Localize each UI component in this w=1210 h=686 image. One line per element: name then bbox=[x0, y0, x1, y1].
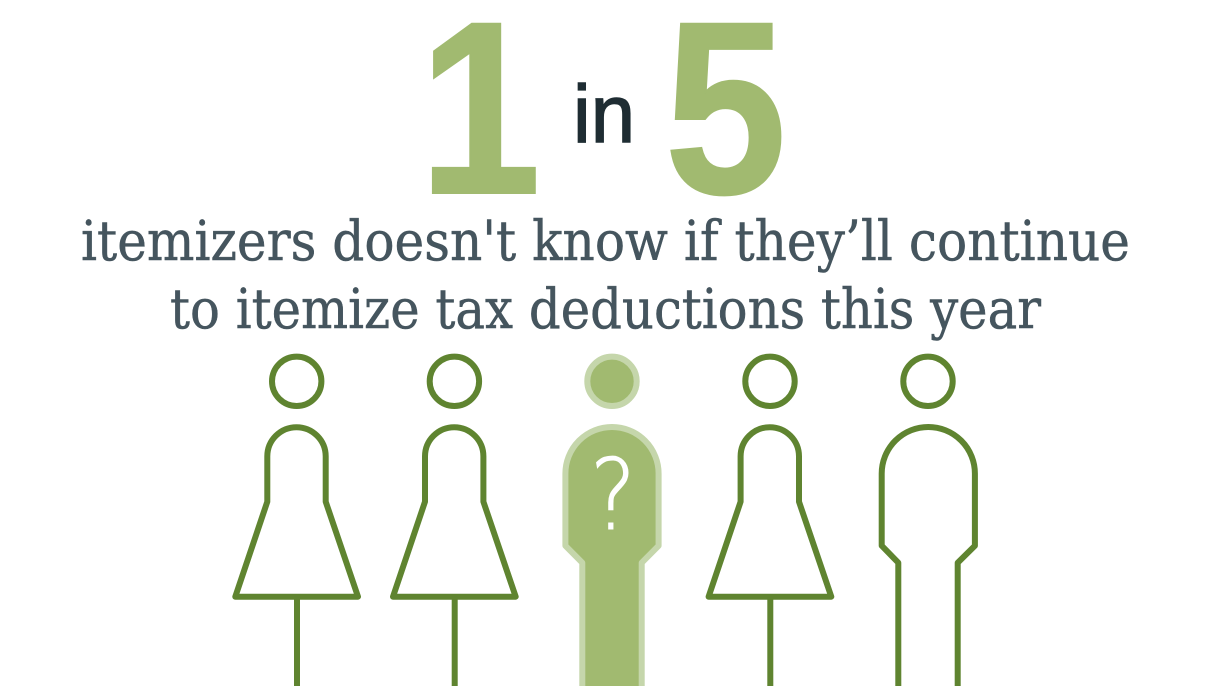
person 2: woman outline bbox=[393, 357, 516, 686]
subheading line 1: itemizers doesn't know if they’ll continue bbox=[81, 209, 1130, 273]
person 3: highlighted filled figure with question mark bbox=[565, 357, 659, 686]
row of five people bbox=[235, 357, 975, 686]
person 5: man outline bbox=[882, 357, 975, 686]
question mark: ? bbox=[590, 439, 636, 553]
person 1: woman outline bbox=[235, 357, 358, 686]
subheading line 2: to itemize tax deductions this year bbox=[170, 277, 1042, 341]
headline statistic: 1 in 5 bbox=[419, 0, 787, 246]
subheading text bbox=[81, 209, 1130, 341]
word: in: in bbox=[573, 69, 635, 160]
person 4: woman outline bbox=[709, 357, 831, 686]
